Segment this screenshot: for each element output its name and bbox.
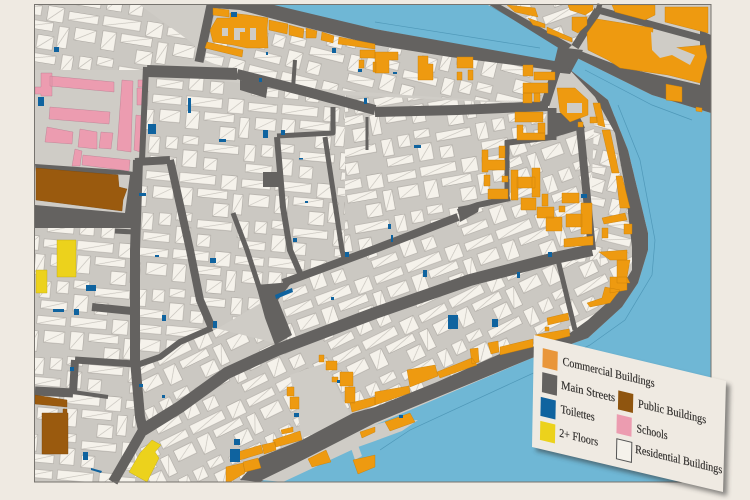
toilets (38, 12, 587, 473)
label: residential buildings: Residential Buildings (635, 442, 723, 477)
legend items (540, 348, 724, 484)
legend card (532, 335, 730, 496)
label: two-plus floors: 2+ Floors (559, 426, 599, 449)
residential buildings (35, 5, 650, 482)
swatch: commercial buildings (542, 348, 558, 371)
schools (35, 70, 144, 171)
courtyards inside commercial blocks (222, 28, 695, 113)
legend shadow (536, 340, 730, 496)
label: schools: Schools (637, 421, 668, 442)
label: toilets: Toilettes (561, 402, 595, 424)
label: main streets: Main Streets (561, 378, 616, 405)
label: commercial buildings: Commercial Buildings (562, 354, 655, 390)
swatch: schools (616, 414, 632, 437)
swatch: main streets (542, 372, 557, 396)
public buildings (35, 168, 127, 454)
swatch: public buildings (618, 390, 633, 413)
commercial buildings (205, 5, 708, 482)
legend panel (532, 335, 726, 492)
two-plus-floor buildings (36, 240, 161, 482)
swatch: two-plus floors (540, 421, 555, 444)
swatch: toilets (540, 397, 556, 420)
swatch: residential buildings (616, 439, 632, 462)
water: canal and river (260, 5, 711, 482)
label: public buildings: Public Buildings (638, 396, 707, 427)
